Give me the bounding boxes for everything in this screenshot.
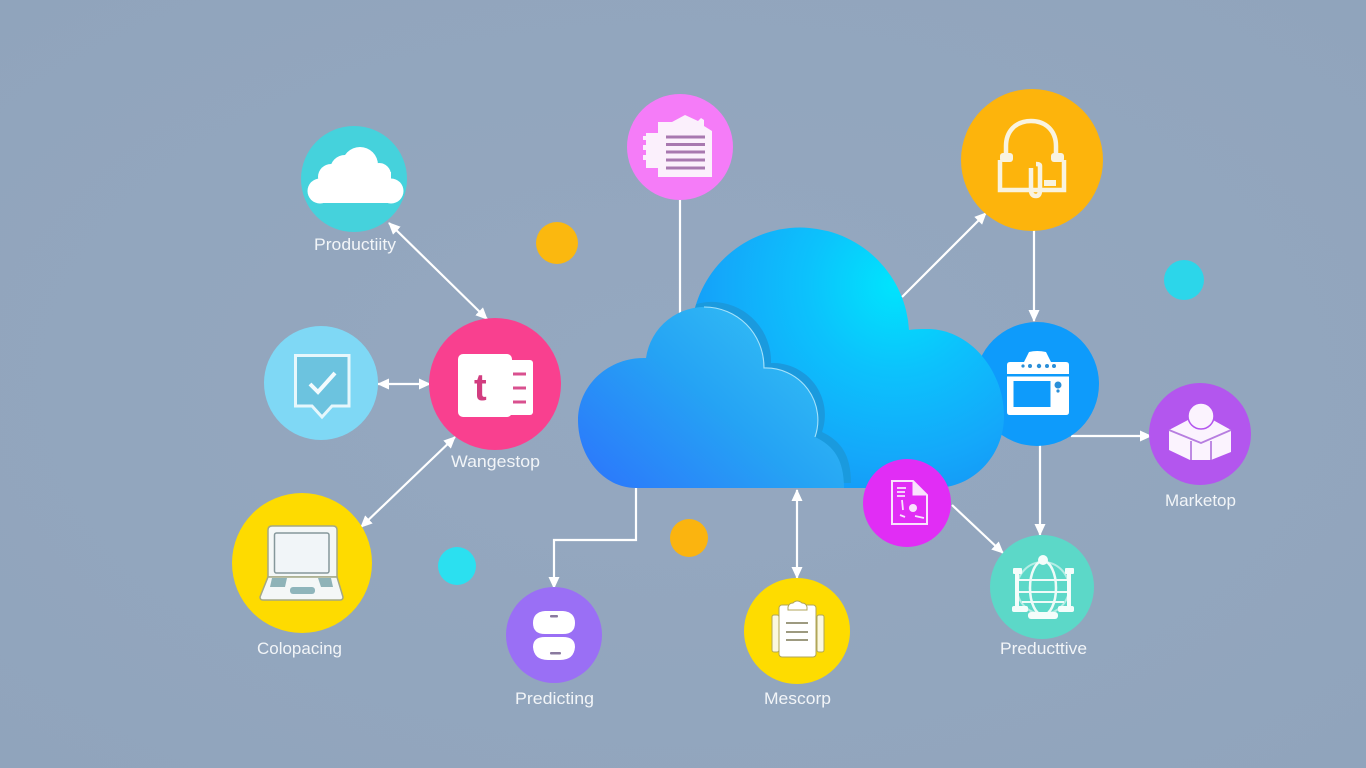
node: camera / oven, blue (975, 322, 1099, 446)
decorative dot: cyan left (438, 547, 476, 585)
node: globe network, mint (990, 535, 1094, 658)
label: Wangestop (451, 452, 540, 471)
label: Preducttive (1000, 639, 1087, 658)
label: Mescorp (764, 689, 831, 708)
cloud overlap shadow (695, 302, 851, 483)
front cloud (578, 307, 844, 488)
node: open book person, purple (1149, 383, 1251, 510)
node: padlock, amber (961, 89, 1103, 231)
label: Marketop (1165, 491, 1236, 510)
node: check badge, light blue (264, 326, 378, 440)
node: t document, hot pink (429, 318, 561, 471)
node: laptop, yellow (232, 493, 372, 658)
back cloud (694, 228, 1004, 488)
decorative dot: cyan right (1164, 260, 1204, 300)
label: Predicting (515, 689, 594, 708)
node: cloud, teal (301, 126, 407, 254)
central cloud illustration (578, 228, 1004, 488)
decorative dot: amber top (536, 222, 578, 264)
node: clipboard, yellow (744, 578, 850, 708)
node: document, magenta (863, 459, 951, 547)
node: capsule stack, violet (506, 587, 602, 708)
node: t document, hot pink: t (474, 367, 487, 409)
icon: cloud (308, 147, 404, 204)
label: Productiity (314, 235, 397, 254)
arrows: connectors between nodes (361, 200, 1151, 588)
label: Colopacing (257, 639, 342, 658)
node: building document, pink (627, 94, 733, 200)
decorative dot: amber bottom (670, 519, 708, 557)
